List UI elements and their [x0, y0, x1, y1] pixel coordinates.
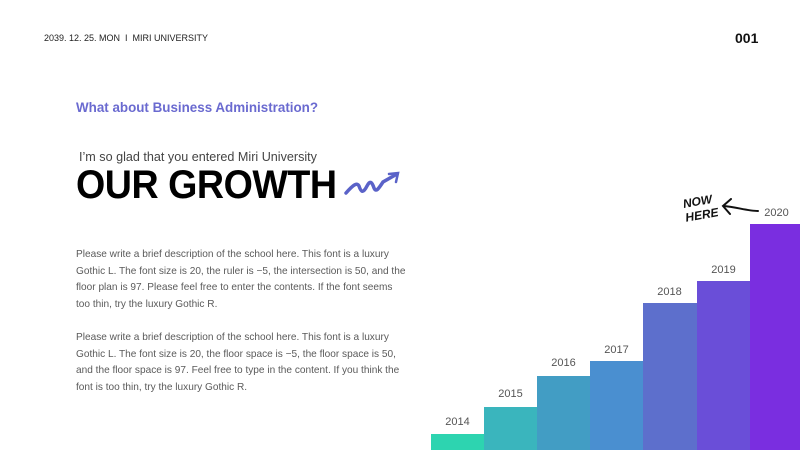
- text block: paragraph 2: font is too thin, try the luxury Gothic R.: [76, 382, 247, 393]
- callout: now here: [682, 192, 759, 225]
- text block: paragraph 2: Gothic L. The font size is 20, the floor space is −5, the floor space is 50,: [76, 349, 396, 360]
- icon: squiggle arrow: [344, 172, 400, 195]
- text block: paragraph 2: [76, 332, 399, 393]
- text block: paragraph 1: [76, 249, 405, 310]
- text block: paragraph 1: Gothic L. The font size is 20, the ruler is −5, the intersection is 50, and the: [76, 266, 405, 277]
- callout: now here: NOW: [682, 192, 713, 211]
- bar chart: growth: 2019: [711, 264, 736, 276]
- bar chart: growth: 2020: [764, 207, 789, 219]
- callout: now here: HERE: [684, 205, 720, 225]
- text block: paragraph 2: Please write a brief description of the school here. This font is a luxury: [76, 332, 389, 343]
- bar chart: growth: 2015: [498, 388, 523, 400]
- bar chart: growth: 2014: [445, 416, 470, 428]
- subtitle: What about Business Administration?: [76, 100, 318, 115]
- text block: paragraph 1: Please write a brief description of the school here. This font is a luxury: [76, 249, 389, 260]
- bar chart: growth: 2016: [551, 357, 576, 369]
- text block: paragraph 1: too thin, try the luxury Gothic R.: [76, 299, 217, 310]
- bar chart: growth: 2018: [657, 286, 682, 298]
- title: OUR GROWTH: [76, 163, 337, 207]
- text block: paragraph 1: floor plan is 97. Please feel free to enter the contents. If the font seems: [76, 282, 392, 293]
- tagline: I’m so glad that you entered Miri University: [79, 150, 317, 164]
- bar chart: growth: 2017: [604, 344, 629, 356]
- header: date: 2039. 12. 25. MON I MIRI UNIVERSITY: [44, 33, 208, 43]
- page number: 001: [735, 30, 758, 46]
- text block: paragraph 2: and the floor space is 97. Feel free to type in the content. If you think the: [76, 365, 399, 376]
